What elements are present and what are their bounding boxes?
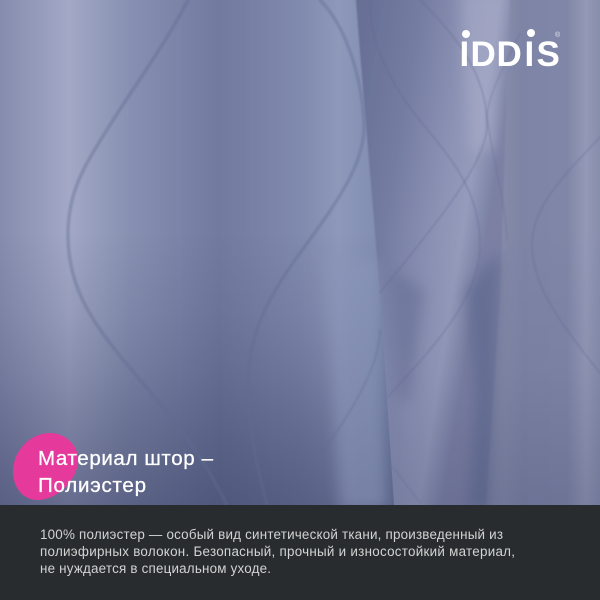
fabric fold: light streak on top of middle fold bbox=[460, 0, 505, 150]
pink blob accent bbox=[13, 433, 78, 500]
heading bbox=[38, 447, 214, 497]
description text: полиэфирных волокон. Безопасный, прочный и износостойкий материал, bbox=[40, 544, 515, 559]
heading: Полиэстер bbox=[38, 474, 146, 497]
description text: не нуждается в специальном уходе. bbox=[40, 561, 271, 576]
description text bbox=[40, 527, 515, 576]
logo: IDDIS: IDDIS bbox=[460, 35, 560, 74]
description text: 100% полиэстер — особый вид синтетической ткани, произведенный из bbox=[40, 527, 503, 542]
heading: Материал штор – bbox=[38, 447, 214, 470]
wave lines woven into the fabric bbox=[68, 0, 600, 505]
dark description band bbox=[0, 505, 600, 600]
fabric fold: lit fold at the right of the left drape bbox=[325, 260, 388, 510]
logo: IDDIS: ® bbox=[555, 31, 561, 39]
fabric fold: shadow at the left of the middle fold bbox=[392, 270, 425, 400]
fabric fold: dark streak on middle fold bbox=[466, 250, 500, 510]
